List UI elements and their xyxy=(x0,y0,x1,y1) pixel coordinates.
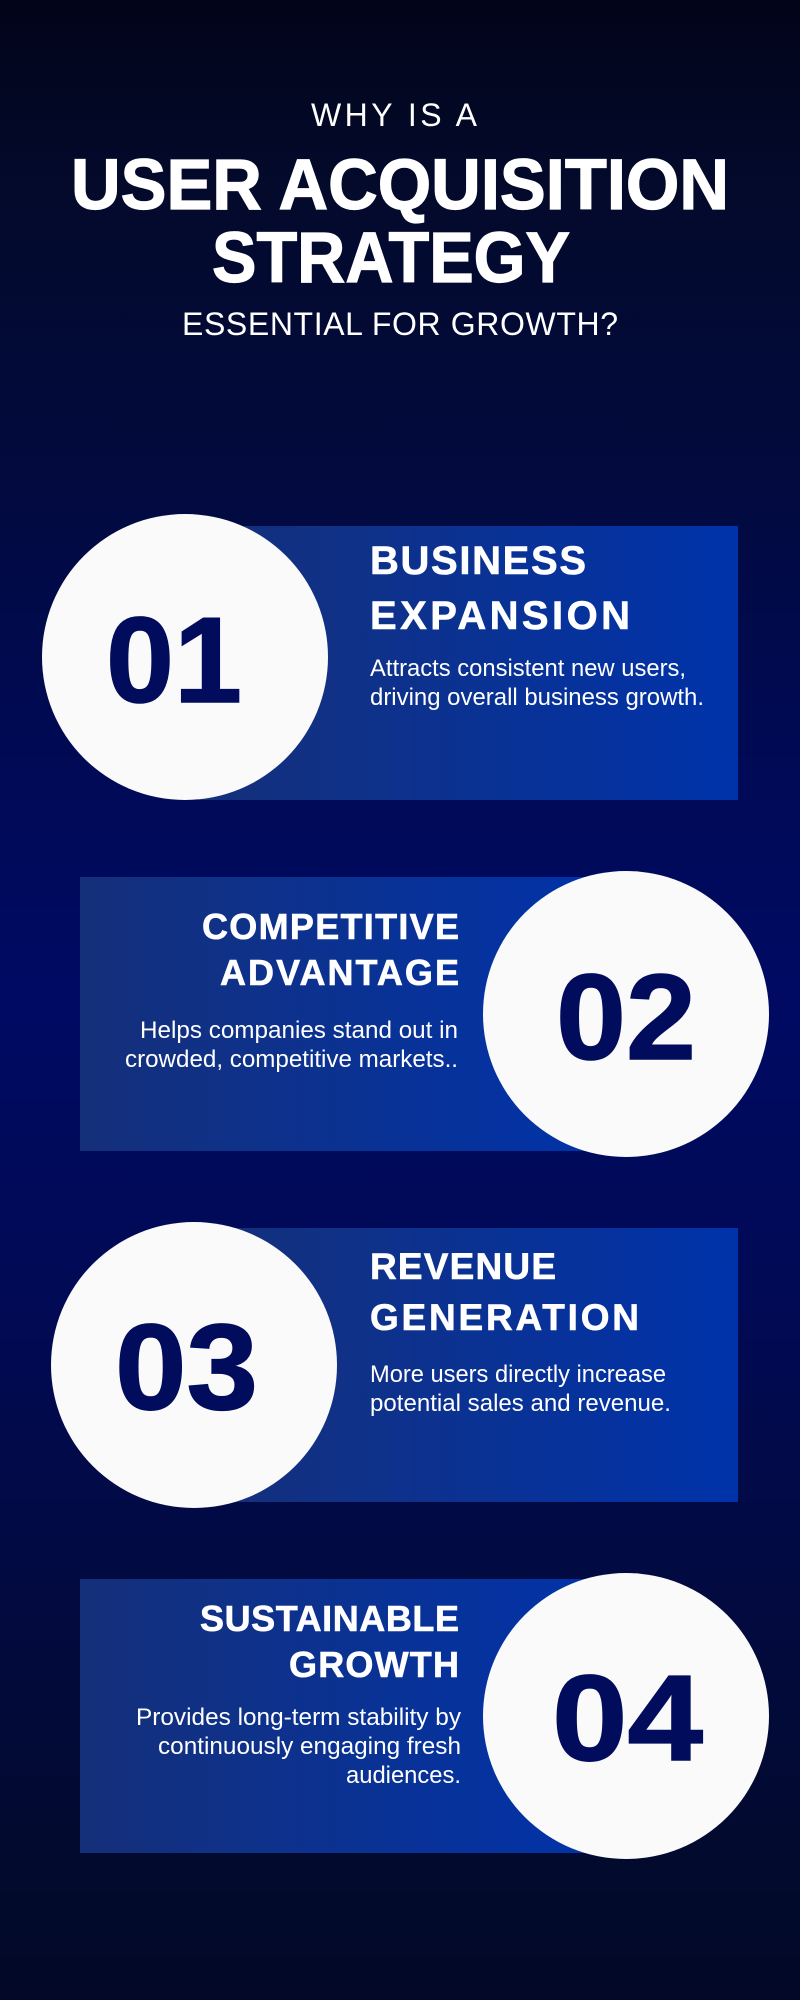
card background xyxy=(198,526,738,800)
number circle 04 xyxy=(483,1573,769,1859)
heading xyxy=(200,1598,459,1685)
panel 02: competitive advantage xyxy=(80,871,769,1157)
description: More users directly increase xyxy=(370,1361,666,1388)
card background xyxy=(80,877,620,1151)
description: continuously engaging fresh xyxy=(158,1733,461,1760)
description xyxy=(370,1361,671,1417)
description: Attracts consistent new users, xyxy=(370,655,686,682)
heading: REVENUE xyxy=(370,1246,556,1287)
description: Provides long-term stability by xyxy=(136,1704,461,1731)
card background xyxy=(198,1228,738,1502)
number circle 02: 02 xyxy=(556,949,696,1085)
heading: COMPETITIVE xyxy=(202,906,459,947)
heading: SUSTAINABLE xyxy=(200,1598,459,1639)
heading: BUSINESS xyxy=(370,539,586,583)
description xyxy=(125,1017,458,1073)
number circle 01: 01 xyxy=(106,592,242,728)
panel 01: business expansion xyxy=(42,514,738,800)
description xyxy=(136,1704,461,1789)
card background xyxy=(80,1579,620,1853)
main title xyxy=(71,146,729,298)
heading: GROWTH xyxy=(289,1644,459,1685)
heading xyxy=(370,539,630,638)
number circle 04: 04 xyxy=(552,1650,703,1786)
panel 04: sustainable growth xyxy=(80,1573,769,1859)
main title: STRATEGY xyxy=(212,219,570,298)
number circle 03: 03 xyxy=(115,1299,258,1435)
heading xyxy=(370,1246,639,1338)
description: Helps companies stand out in xyxy=(140,1017,458,1044)
header title xyxy=(71,97,729,342)
panel 03: revenue generation xyxy=(51,1222,738,1508)
heading xyxy=(202,906,459,993)
number circle 01 xyxy=(42,514,328,800)
description: crowded, competitive markets.. xyxy=(125,1046,458,1073)
subtitle: ESSENTIAL FOR GROWTH? xyxy=(182,306,618,342)
main title: USER ACQUISITION xyxy=(71,146,729,225)
kicker: why is a: WHY IS A xyxy=(311,97,478,133)
number circle 03 xyxy=(51,1222,337,1508)
number circle 02 xyxy=(483,871,769,1157)
description xyxy=(370,655,704,711)
description: driving overall business growth. xyxy=(370,684,704,711)
description: potential sales and revenue. xyxy=(370,1390,671,1417)
description: audiences. xyxy=(346,1762,461,1789)
heading: EXPANSION xyxy=(370,594,630,638)
heading: ADVANTAGE xyxy=(220,952,459,993)
heading: GENERATION xyxy=(370,1297,639,1338)
